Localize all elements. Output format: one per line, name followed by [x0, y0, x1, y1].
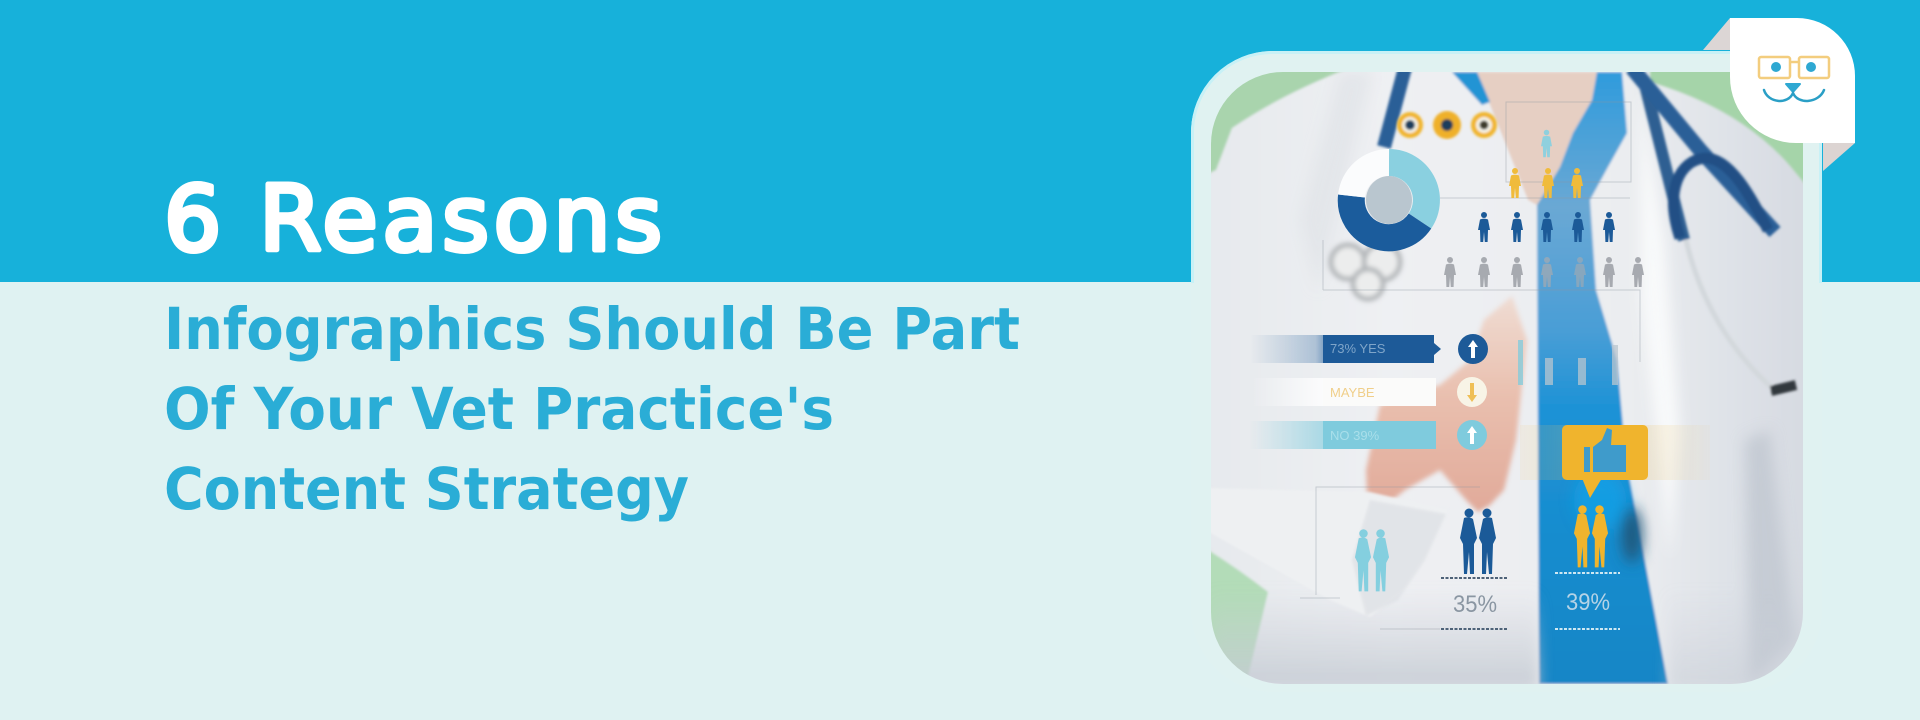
left collar — [1452, 72, 1490, 105]
donut chart — [1351, 162, 1426, 238]
stethoscope — [1384, 68, 1796, 391]
subtitle: three-line heading — [164, 295, 1020, 523]
navy people row — [1478, 212, 1615, 242]
neck skin — [1477, 72, 1600, 205]
grey people row — [1444, 257, 1644, 287]
horizontal bar: 73% yes — [1250, 334, 1488, 364]
logo: white leaf badge with dog face — [1730, 18, 1855, 143]
percentage labels — [1454, 593, 1610, 612]
dashed rules — [1441, 573, 1620, 629]
coat shading — [1211, 72, 1808, 690]
horizontal bar: 73% yes: 73% YES — [1330, 341, 1386, 356]
gold couple — [1574, 505, 1608, 567]
dog nose — [1786, 84, 1800, 92]
hand — [1366, 296, 1527, 520]
horizontal bar: maybe: MAYBE — [1330, 385, 1375, 400]
shirt and tie — [1537, 72, 1668, 684]
stethoscope chest piece — [1331, 244, 1400, 299]
photo: doctor with holographic data — [1205, 66, 1810, 690]
card light edge above band — [1191, 51, 1822, 283]
top blue band — [0, 0, 1920, 282]
coat cuff — [1361, 490, 1398, 615]
subtitle: three-line heading: Infographics Should Be Part — [164, 295, 1020, 363]
percentage labels: 35% — [1453, 591, 1497, 618]
horizontal bar: maybe — [1288, 377, 1487, 407]
gold people row — [1509, 168, 1583, 198]
subtitle: three-line heading: Content Strategy — [164, 455, 689, 523]
logo: folded corner tabs — [1703, 18, 1855, 171]
green backdrop corners — [1211, 72, 1342, 174]
pictogram rows — [1444, 130, 1644, 287]
title: 6 Reasons: 6 Reasons — [164, 167, 662, 272]
light blue couple — [1355, 529, 1389, 591]
navy couple — [1460, 508, 1496, 574]
percentage labels: 39% — [1566, 589, 1610, 616]
dog glasses — [1759, 57, 1829, 78]
subtitle: three-line heading: Of Your Vet Practice's — [164, 375, 834, 443]
thin grid lines — [1300, 102, 1640, 629]
dog mouth — [1764, 90, 1824, 101]
mini bar chart — [1518, 340, 1618, 385]
thumbs up speech bubble — [1520, 425, 1710, 498]
cyan person top — [1541, 130, 1552, 157]
coat base — [1205, 66, 1810, 690]
photo card frame — [1191, 51, 1822, 692]
horizontal bar: no — [1250, 420, 1487, 450]
dog eyes — [1771, 62, 1816, 72]
tie dark spot — [1622, 507, 1642, 563]
row of gold eye markers — [1397, 111, 1497, 139]
horizontal bar: no: NO 39% — [1330, 428, 1380, 443]
